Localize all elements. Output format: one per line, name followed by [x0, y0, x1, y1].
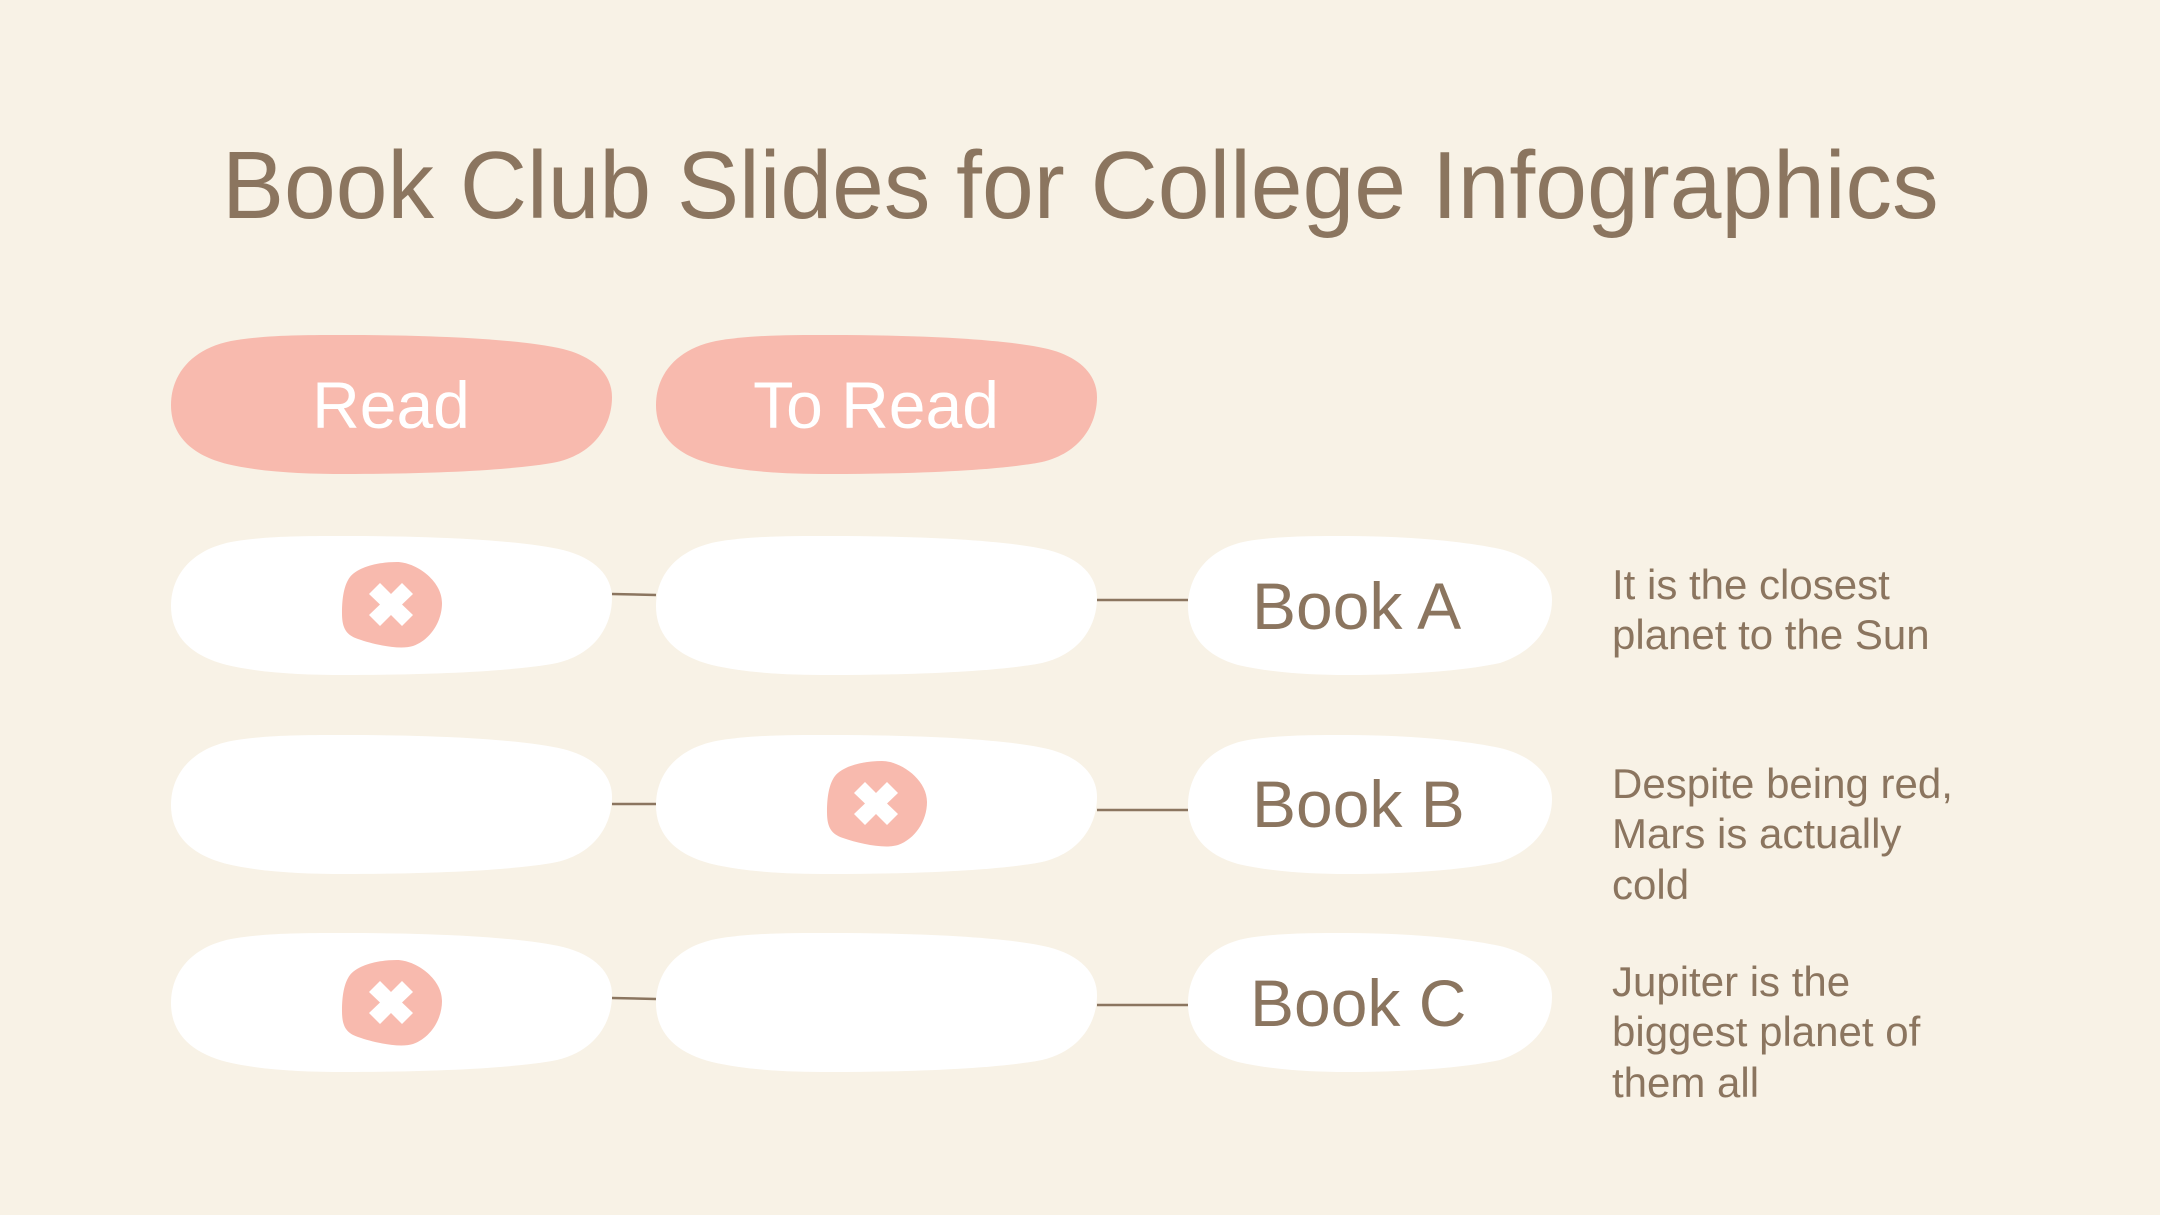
header pill: To Read: To Read	[753, 368, 999, 442]
header pill: Read	[171, 335, 612, 474]
row B: description: cold	[1612, 861, 1689, 908]
row A: Book A label: Book A	[1252, 569, 1461, 643]
connector lines: row A	[612, 594, 1188, 600]
row C: To Read cell	[656, 933, 1097, 1072]
row A: Read cell with mark	[171, 536, 612, 675]
row C: description: them all	[1612, 1059, 1759, 1106]
title: Book Club Slides for College Infographics	[222, 132, 1939, 239]
icon: x mark	[827, 761, 927, 846]
row C: description: Jupiter is the	[1612, 958, 1850, 1005]
row B: To Read cell with mark	[656, 735, 1097, 874]
row B: Read cell	[171, 735, 612, 874]
row C: Book C label: Book C	[1250, 966, 1466, 1040]
icon: x mark	[342, 960, 442, 1045]
row C: description: biggest planet of	[1612, 1008, 1921, 1055]
connector lines: row C	[612, 998, 1188, 1005]
header pill: Read: Read	[312, 368, 470, 442]
row B: description: Mars is actually	[1612, 810, 1901, 857]
row B: Book B label: Book B	[1252, 767, 1465, 841]
row A: To Read cell	[656, 536, 1097, 675]
row C: Read cell with mark	[171, 933, 612, 1072]
row B: description: Despite being red,	[1612, 760, 1953, 807]
row C: Book C label	[1188, 933, 1552, 1072]
connector lines: row B	[612, 804, 1188, 810]
row B: Book B label	[1188, 735, 1552, 874]
header pill: To Read	[656, 335, 1097, 474]
icon: x mark	[342, 562, 442, 647]
row A: Book A label	[1188, 536, 1552, 675]
row A: description: It is the closest	[1612, 561, 1890, 608]
row A: description: planet to the Sun	[1612, 611, 1930, 658]
